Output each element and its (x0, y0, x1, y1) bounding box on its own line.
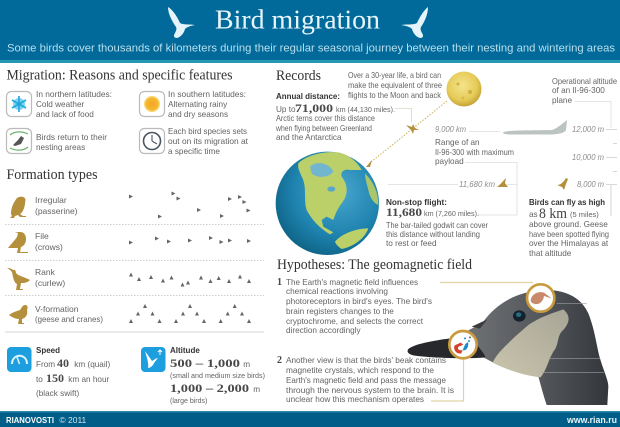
icon: moon (446, 72, 482, 106)
icon: airplane (503, 120, 567, 134)
text: hypothesis 1: The Earth's magnetic field influences (286, 278, 418, 287)
text: operational altitude: of an Il-96-300 (552, 86, 605, 95)
panel: speed (7, 346, 110, 398)
goose neck and crown (450, 290, 608, 405)
connector: altitude plane (575, 102, 611, 128)
subtitle: Some birds cover thousands of kilometers during their regular seasonal journey between their nesting and wintering areas (7, 42, 616, 54)
line: range (469, 130, 500, 132)
text: specific time: Each bird species sets (168, 127, 247, 136)
text: annual distance: km (44,130 miles). (336, 105, 395, 114)
icon: arctic tern (406, 124, 419, 134)
text: birds fly high (529, 198, 609, 258)
text: annual distance: when flying between Greenland (275, 124, 372, 133)
heading: formation types: Formation types (6, 167, 98, 183)
text: speed values: to (36, 375, 45, 384)
label: v-formation: (geese and cranes) (35, 314, 103, 324)
text: birds fly high: 8 km (539, 206, 567, 222)
icon: passerine (10, 197, 26, 218)
label: rank: Rank (35, 267, 56, 277)
panel: altitude (141, 346, 265, 405)
text: birds fly high: have been spotted flying (529, 230, 609, 239)
heading: reasons: Migration: Reasons and specific features (6, 68, 233, 84)
panel: formation types (5, 167, 264, 332)
text: non-stop flight: Non-stop flight: (386, 198, 447, 207)
text: specific time: a specific time (168, 147, 220, 156)
text: birds fly high: (5 miles) (570, 210, 599, 219)
heading: hypotheses: Hypotheses: The geomagnetic field (277, 257, 472, 273)
text: altitude values: m (251, 385, 260, 394)
text: hypothesis 1: chemical reactions involving (286, 287, 388, 296)
label: speed: Speed (36, 346, 60, 355)
text: hypothesis 1: cryptochrome, and selects the correct (286, 317, 424, 326)
text: altitude values: (large birds) (170, 398, 207, 405)
altitude scale (572, 125, 617, 216)
chart: v-formation birds (129, 304, 251, 323)
icon: returning bird (6, 128, 32, 154)
icon: bird altitude (141, 347, 166, 372)
icon: goose (9, 305, 28, 324)
header banner (0, 0, 620, 63)
goose eye (513, 310, 526, 322)
panel: geomagnetic field (277, 257, 608, 405)
text: non-stop flight: 11,680 (386, 205, 422, 219)
chart: irregular birds (129, 192, 250, 218)
number 2: 2 (277, 355, 282, 366)
label: 9000 km: 9,000 km (435, 125, 466, 134)
text: annual distance: Arctic terns cover this distance (276, 114, 375, 123)
label: v-formation: V-formation (35, 304, 79, 314)
text: range: Range of an (435, 138, 480, 147)
icon: high flying goose (557, 178, 568, 190)
text: birds fly high: that altitude (529, 249, 572, 258)
goose cheek patch (493, 309, 569, 377)
text: annual distance (275, 92, 395, 142)
text: non-stop flight: The bar-tailed godwit can cover (386, 221, 488, 230)
altitude scale: 8,000 m (577, 180, 604, 189)
text: birds fly high: Birds can fly as high (529, 198, 605, 207)
footer: website: www.rian.ru (566, 415, 617, 425)
text: altitude values: 500 – 1,000 (170, 358, 240, 370)
goose beak (408, 338, 485, 358)
icon: snowflake (6, 92, 32, 116)
icon: speedometer (7, 347, 32, 372)
text: altitude values: 1,000 – 2,000 (170, 383, 249, 395)
text: annual distance: Up to (276, 105, 296, 114)
text: altitude values: (small and medium size birds) (170, 373, 265, 380)
icon: sun (140, 92, 164, 116)
icon: earth globe (276, 152, 379, 255)
text: annual distance: 71,000 (295, 101, 333, 115)
connector: tern line (395, 108, 412, 122)
text: hypothesis 1: brain registers changes to the (286, 307, 394, 316)
icon: crow (8, 232, 28, 253)
text: hypothesis 2: unclear how this mechanism operates (286, 395, 424, 404)
text: hypothesis 1: direction accordingly (286, 326, 362, 335)
footer banner (0, 411, 620, 427)
icon: left white bird (168, 7, 195, 38)
text: hypothesis 2: Another view is that the birds' beak contains (286, 356, 446, 365)
title: Bird migration (215, 4, 381, 34)
text: speed values: km an hour (66, 375, 110, 384)
text: non-stop flight: km (7,260 miles). (424, 209, 479, 218)
text: hypothesis 2: magnetite crystals, which respond to the (286, 366, 434, 375)
heading: records: Records (276, 68, 321, 84)
text: hypothesis 2: through the nervous system to the brain. It is (286, 386, 454, 395)
label: irregular: Irregular (35, 195, 67, 205)
panel: reasons and specific features (6, 68, 249, 156)
text: altitude values: m (241, 360, 250, 369)
illustration: goose head (408, 284, 608, 405)
text: range: Il-96-300 with maximum (435, 148, 514, 157)
text: moon flights: Over a 30-year life, a bird can (348, 71, 441, 80)
icon: godwit (497, 178, 508, 187)
icon: cryptochrome circle (527, 284, 554, 312)
footer: credit: RIANOVOSTI (6, 415, 54, 425)
text: hypothesis 1: photoreceptors in bird's eyes. The bird's (286, 297, 432, 306)
label: altitude: Altitude (170, 346, 200, 355)
footer: credit: © 2011 (57, 415, 87, 425)
label: irregular: (passerine) (35, 206, 78, 216)
text: operational altitude: plane (552, 96, 572, 105)
text: speed values: From (36, 360, 57, 369)
connector: range (465, 162, 517, 215)
icon: magnet circle (449, 331, 477, 358)
text: southern latitudes: Alternating rainy (168, 100, 228, 109)
text: speed values: (black swift) (36, 389, 79, 398)
text: birds fly high: over the Himalayas at (529, 239, 609, 248)
line: 11680 range (388, 184, 517, 186)
text: speed values: 40 (57, 356, 69, 370)
icon: curlew (7, 268, 30, 290)
altitude scale: 12,000 m (572, 125, 604, 134)
text: return to nesting: nesting areas (36, 143, 85, 152)
text: annual distance: Annual distance: (276, 92, 340, 101)
text: specific time: out on its migration at (168, 137, 249, 146)
text: northern latitudes: and lack of food (36, 110, 94, 119)
text: range: payload (435, 157, 464, 166)
text: moon flights: make the equivalent of three (348, 81, 442, 90)
label: 11680 km: 11,680 km (459, 180, 495, 189)
chart: rank birds (129, 272, 251, 286)
text: annual distance: and the Antarctica (276, 133, 342, 142)
text: northern latitudes: Cold weather (36, 100, 85, 109)
altitude scale: 10,000 m (572, 153, 604, 162)
icon: clock (140, 128, 164, 154)
connector: hypothesis 1 (440, 282, 533, 284)
text: return to nesting: Birds return to their (36, 133, 107, 142)
number 1: 1 (277, 277, 282, 288)
text: birds fly high: above ground. Geese (529, 220, 608, 229)
text: birds fly high: as (529, 210, 538, 219)
label: file: (crows) (35, 242, 63, 252)
text: moon flights: flights to the Moon and back (348, 91, 442, 100)
text: speed values: km (quail) (72, 360, 110, 369)
text: southern latitudes: and dry seasons (168, 110, 228, 119)
arrow tip at earth (366, 160, 372, 167)
text: non-stop flight (386, 198, 488, 248)
connector: hypothesis 2 (431, 352, 464, 401)
text: hypothesis 2: Earth's magnetic field and pass the message (286, 376, 446, 385)
text: non-stop flight: to rest or feed (386, 239, 437, 248)
arrow: earth to moon dotted (371, 101, 447, 162)
icon: right white bird (401, 7, 428, 38)
text: non-stop flight: this distance without landing (386, 230, 480, 239)
text: speed values: 150 (46, 371, 64, 385)
label: rank: (curlew) (35, 278, 65, 288)
label: file: File (35, 231, 49, 241)
text: northern latitudes: In northern latitudes: (36, 90, 112, 99)
chart: file birds (129, 236, 251, 244)
panel: records (275, 68, 617, 258)
text: southern latitudes: In southern latitudes: (168, 90, 246, 99)
